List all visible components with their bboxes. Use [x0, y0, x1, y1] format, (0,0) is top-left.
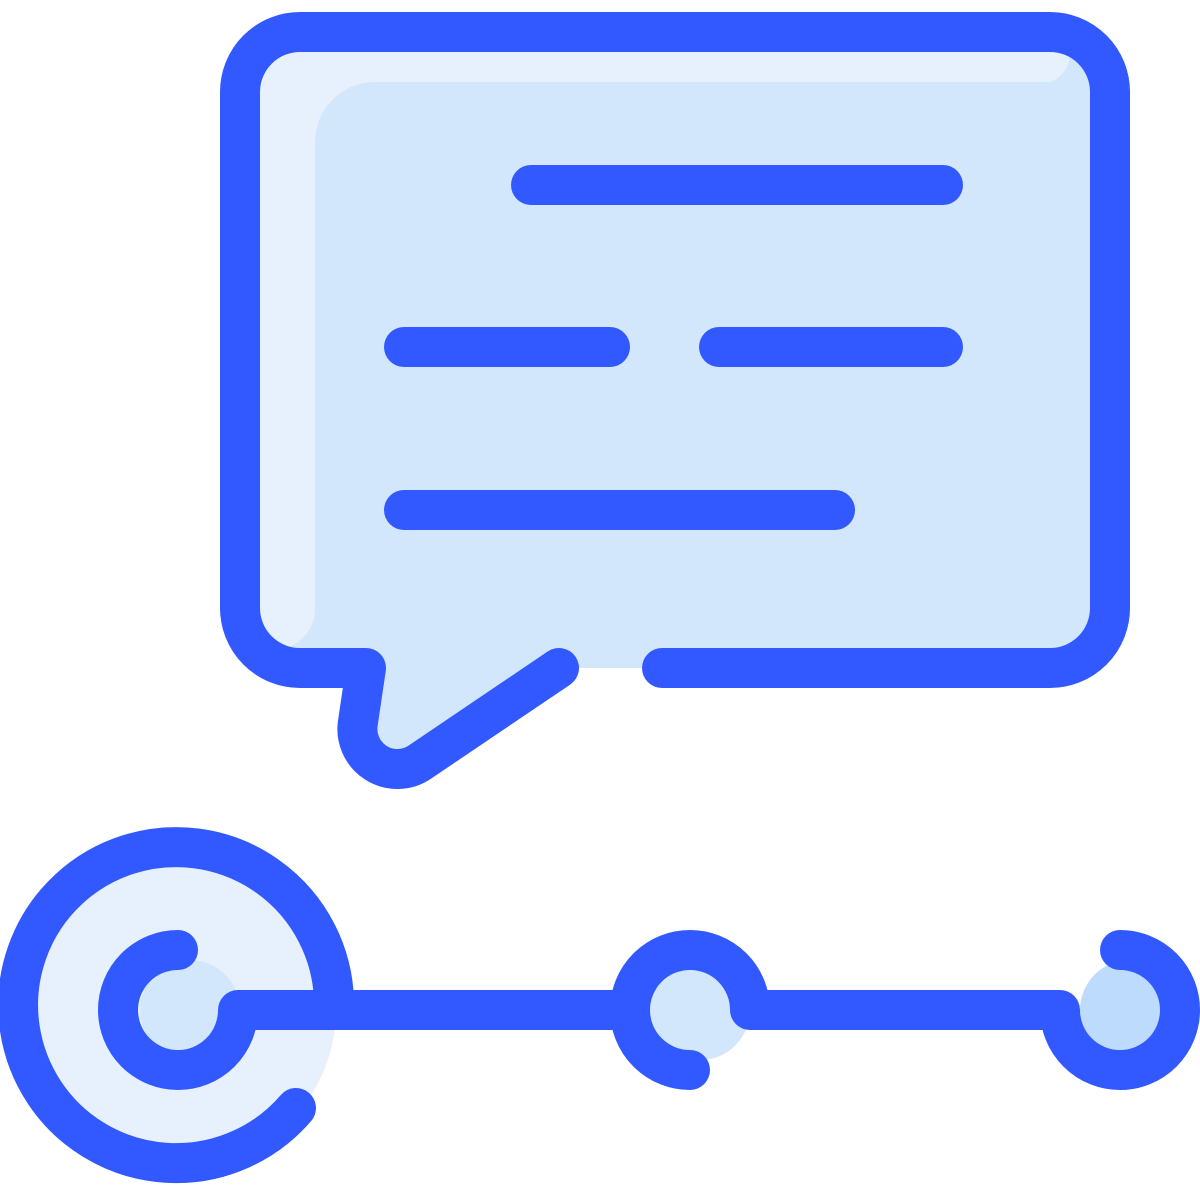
text lines — [404, 185, 943, 510]
timeline — [18, 847, 1180, 1168]
speech bubble — [240, 32, 1110, 769]
